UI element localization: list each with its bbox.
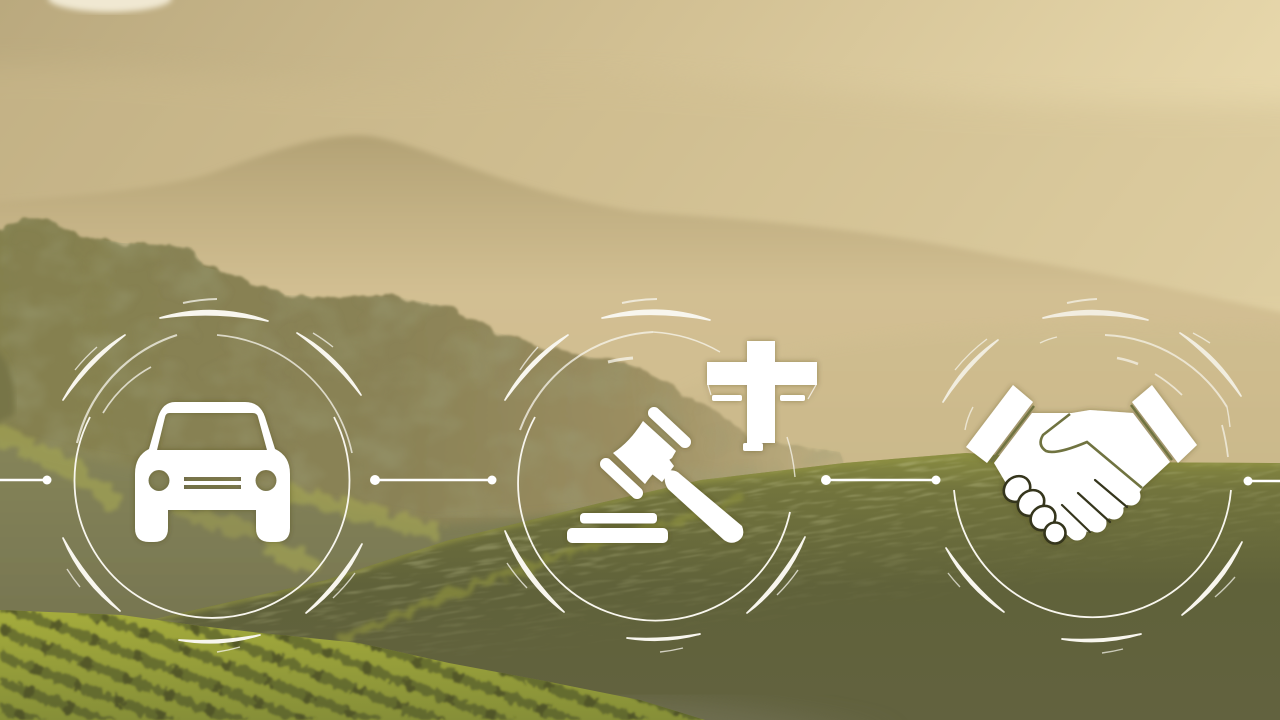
right cuff [1132, 385, 1197, 463]
cuff seams [991, 405, 1172, 462]
ring: car [63, 299, 362, 652]
connector line: car to gavel [370, 475, 496, 485]
ring: gavel [505, 299, 805, 652]
finger separators [1062, 480, 1127, 532]
icon: car [135, 402, 290, 542]
hands [994, 410, 1170, 532]
ring: handshake [943, 299, 1242, 653]
left hand knuckles [999, 471, 1066, 544]
right thumb outline [1041, 414, 1142, 488]
connector line: handshake to right edge [1244, 476, 1280, 486]
icon: cross [707, 341, 817, 451]
background: dark tree-lined hill [0, 216, 844, 620]
icon: gavel and sounding block [567, 413, 743, 543]
connector line: left edge to car [0, 476, 52, 484]
background: vineyard hills [0, 453, 1280, 720]
connector line: gavel to handshake [821, 475, 940, 485]
left cuff [966, 385, 1033, 463]
fingers [1056, 473, 1131, 531]
icon: handshake [966, 385, 1197, 544]
